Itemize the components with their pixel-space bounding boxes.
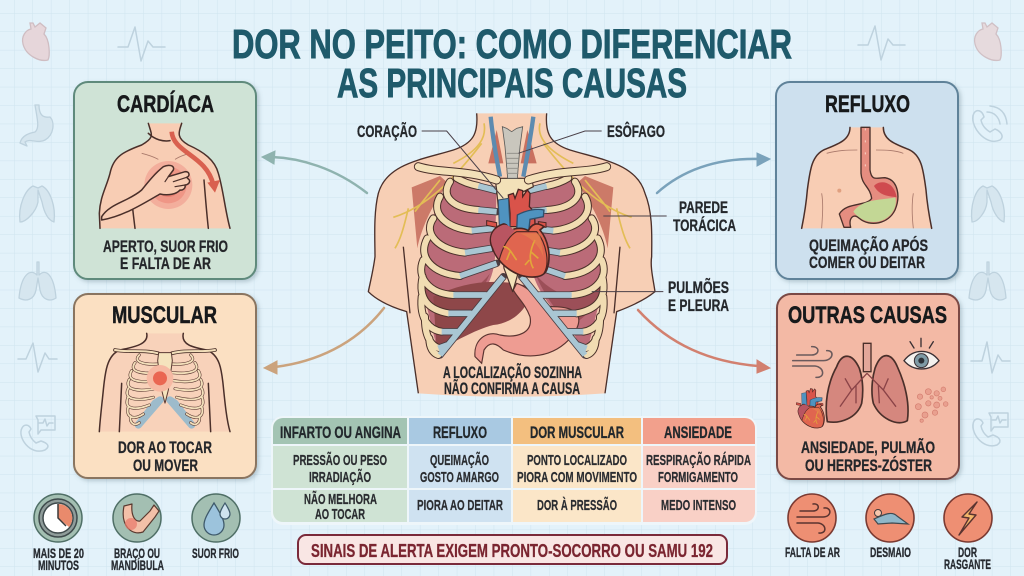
title: AS PRINCIPAIS CAUSAS — [337, 60, 687, 106]
caption: localização: A LOCALIZAÇÃO SOZINHA — [443, 362, 582, 382]
neck muscles and vessels — [453, 117, 573, 177]
icon: mais de 20 minutos — [33, 494, 84, 573]
icon: mais de 20 minutos: MINUTOS — [38, 558, 79, 573]
column: dor muscular: DOR MUSCULAR — [530, 424, 624, 442]
text: sintomas muscular: DOR AO TOCAR — [118, 438, 212, 457]
panel: muscular — [74, 294, 256, 478]
torso — [368, 113, 655, 397]
column: infarto ou angina: AO TOCAR — [315, 506, 365, 523]
label: pulmões e pleura: E PLEURA — [668, 297, 729, 315]
left clavicle — [418, 167, 497, 180]
icon: lungs — [826, 343, 908, 423]
icon: stomach watermark — [20, 105, 53, 146]
column: refluxo: PIORA AO DEITAR — [417, 497, 503, 514]
column: ansiedade: MEDO INTENSO — [661, 497, 736, 514]
heading: outras causas: OUTRAS CAUSAS — [788, 302, 947, 329]
watermark icons left column — [18, 23, 165, 451]
icon: falta de ar: FALTA DE AR — [785, 545, 840, 560]
icon: desmaio — [866, 494, 914, 560]
text: sintomas refluxo — [809, 235, 928, 272]
icon: heart watermark right — [975, 23, 1001, 60]
column: dor muscular — [513, 418, 641, 522]
title: DOR NO PEITO: COMO DIFERENCIAR — [232, 21, 792, 67]
icon: phone and monitor watermark right — [973, 413, 1008, 446]
comparison table — [271, 416, 757, 525]
arrow: centre to refluxo — [657, 153, 770, 193]
left chest: lung, muscle and nerves — [393, 143, 497, 355]
arrow: centre to muscular — [264, 308, 384, 374]
text: sintomas outras causas: OU HERPES-ZÓSTER — [805, 456, 932, 475]
column: ansiedade: FORMIGAMENTO — [658, 469, 738, 486]
illustration: rib cage with pain point — [99, 333, 230, 432]
arrow: centre to outras causas — [638, 310, 770, 373]
text: sintomas cardíaca: E FALTA DE AR — [120, 254, 211, 273]
text: sintomas outras causas: ANSIEDADE, PULMÃO — [801, 437, 935, 457]
icon: suor frio: SUOR FRIO — [192, 546, 239, 561]
column: infarto ou angina: PRESSÃO OU PESO — [293, 451, 387, 469]
panel: refluxo — [776, 82, 958, 279]
icon: phone watermark — [973, 106, 1007, 141]
icon: ecg watermark right — [971, 342, 1010, 373]
illustration: esophagus and stomach — [802, 127, 932, 228]
column: ansiedade: RESPIRAÇÃO RÁPIDA — [646, 451, 751, 469]
column: ansiedade — [643, 418, 755, 522]
icon: desmaio: DESMAIO — [870, 545, 911, 560]
label: parede torácica: PAREDE — [679, 199, 728, 217]
icon: phone and monitor watermark — [21, 416, 55, 451]
right chest: lung, muscle and nerves — [528, 143, 632, 355]
sternum — [495, 178, 533, 292]
column: dor muscular: PIORA COM MOVIMENTO — [517, 469, 637, 486]
watermark icons right column — [858, 23, 1010, 446]
leader lines — [422, 131, 667, 292]
arrow: centre to cardiaca — [262, 151, 367, 193]
text: sintomas refluxo: COMER OU DEITAR — [809, 253, 925, 272]
alert banner: SINAIS DE ALERTA EXIGEM PRONTO-SOCORRO OU SAMU 192 — [311, 540, 713, 561]
icon: ecg watermark — [118, 27, 165, 61]
label: esôfago: ESÔFAGO — [607, 122, 665, 141]
icon: falta de ar — [785, 494, 840, 560]
label: pulmões e pleura: PULMÕES — [668, 277, 729, 297]
heading: cardíaca: CARDÍACA — [117, 90, 214, 118]
text: sintomas outras causas — [801, 437, 935, 475]
text: sintomas cardíaca — [103, 237, 228, 273]
column: refluxo: REFLUXO — [433, 424, 487, 442]
text: sintomas cardíaca: APERTO, SUOR FRIO — [103, 237, 228, 256]
icon: lungs watermark — [19, 262, 56, 300]
column: infarto ou angina: INFARTO OU ANGINA — [280, 424, 401, 442]
column: refluxo: GOSTO AMARGO — [420, 469, 499, 486]
icon: lungs watermark right — [969, 262, 1006, 300]
icon: dor rasgante — [944, 494, 992, 572]
caption: localização — [443, 362, 582, 398]
icon: mais de 20 minutos: MAIS DE 20 — [33, 546, 84, 561]
liver — [433, 282, 530, 350]
icon: ribcage watermark — [20, 186, 54, 222]
trachea — [502, 127, 523, 178]
column: dor muscular: DOR À PRESSÃO — [537, 496, 617, 514]
icon: heart — [796, 389, 824, 428]
label: parede torácica: TORÁCICA — [673, 216, 736, 235]
icon: ecg watermark — [18, 343, 57, 372]
icon: dor rasgante: DOR — [958, 545, 977, 560]
heart — [487, 189, 549, 277]
column: infarto ou angina — [273, 418, 407, 523]
column: refluxo: QUEIMAÇÃO — [430, 451, 489, 469]
label: parede torácica — [673, 199, 736, 235]
illustration group: other causes — [793, 338, 948, 428]
column: infarto ou angina: IRRADIAÇÃO — [309, 468, 371, 486]
text: sintomas refluxo: QUEIMAÇÃO APÓS — [809, 235, 928, 255]
icon: ribcage watermark right — [972, 186, 1004, 222]
label: coração: CORAÇÃO — [357, 121, 417, 141]
central anatomy illustration — [368, 113, 667, 397]
label: pulmões e pleura — [668, 277, 729, 315]
left ribs — [421, 178, 503, 355]
panel: outras causas — [777, 294, 959, 479]
column: dor muscular: PONTO LOCALIZADO — [527, 452, 627, 469]
icon: braço ou mandíbula: MANDÍBULA — [111, 558, 164, 573]
caption: localização: NÃO CONFIRMA A CAUSA — [444, 378, 580, 398]
clavicle bone fill — [418, 167, 607, 180]
column: ansiedade: ANSIEDADE — [664, 424, 732, 442]
torso outline — [368, 113, 655, 393]
heading: muscular: MUSCULAR — [112, 302, 217, 329]
title — [232, 21, 792, 106]
column: refluxo — [409, 418, 511, 522]
stomach — [475, 283, 579, 363]
icon: dor rasgante: RASGANTE — [944, 557, 991, 572]
illustration: hand on chest — [99, 123, 230, 228]
column: infarto ou angina: NÃO MELHORA — [304, 490, 377, 508]
icon: suor frio — [192, 494, 240, 561]
icon: ecg watermark top — [858, 26, 905, 60]
right clavicle — [528, 167, 607, 180]
icon: heart watermark — [23, 23, 49, 60]
panel: cardíaca — [74, 82, 256, 279]
icon: rash — [915, 387, 948, 422]
alert banner — [298, 535, 727, 564]
icon: wind — [793, 347, 832, 377]
text: sintomas muscular — [118, 438, 212, 475]
text: sintomas muscular: OU MOVER — [133, 456, 198, 475]
icon: eye — [904, 338, 939, 369]
icon: braço ou mandíbula: BRAÇO OU — [114, 546, 160, 561]
icon: braço ou mandíbula — [111, 494, 164, 573]
heading: refluxo: REFLUXO — [825, 91, 910, 118]
right ribs — [522, 178, 604, 355]
